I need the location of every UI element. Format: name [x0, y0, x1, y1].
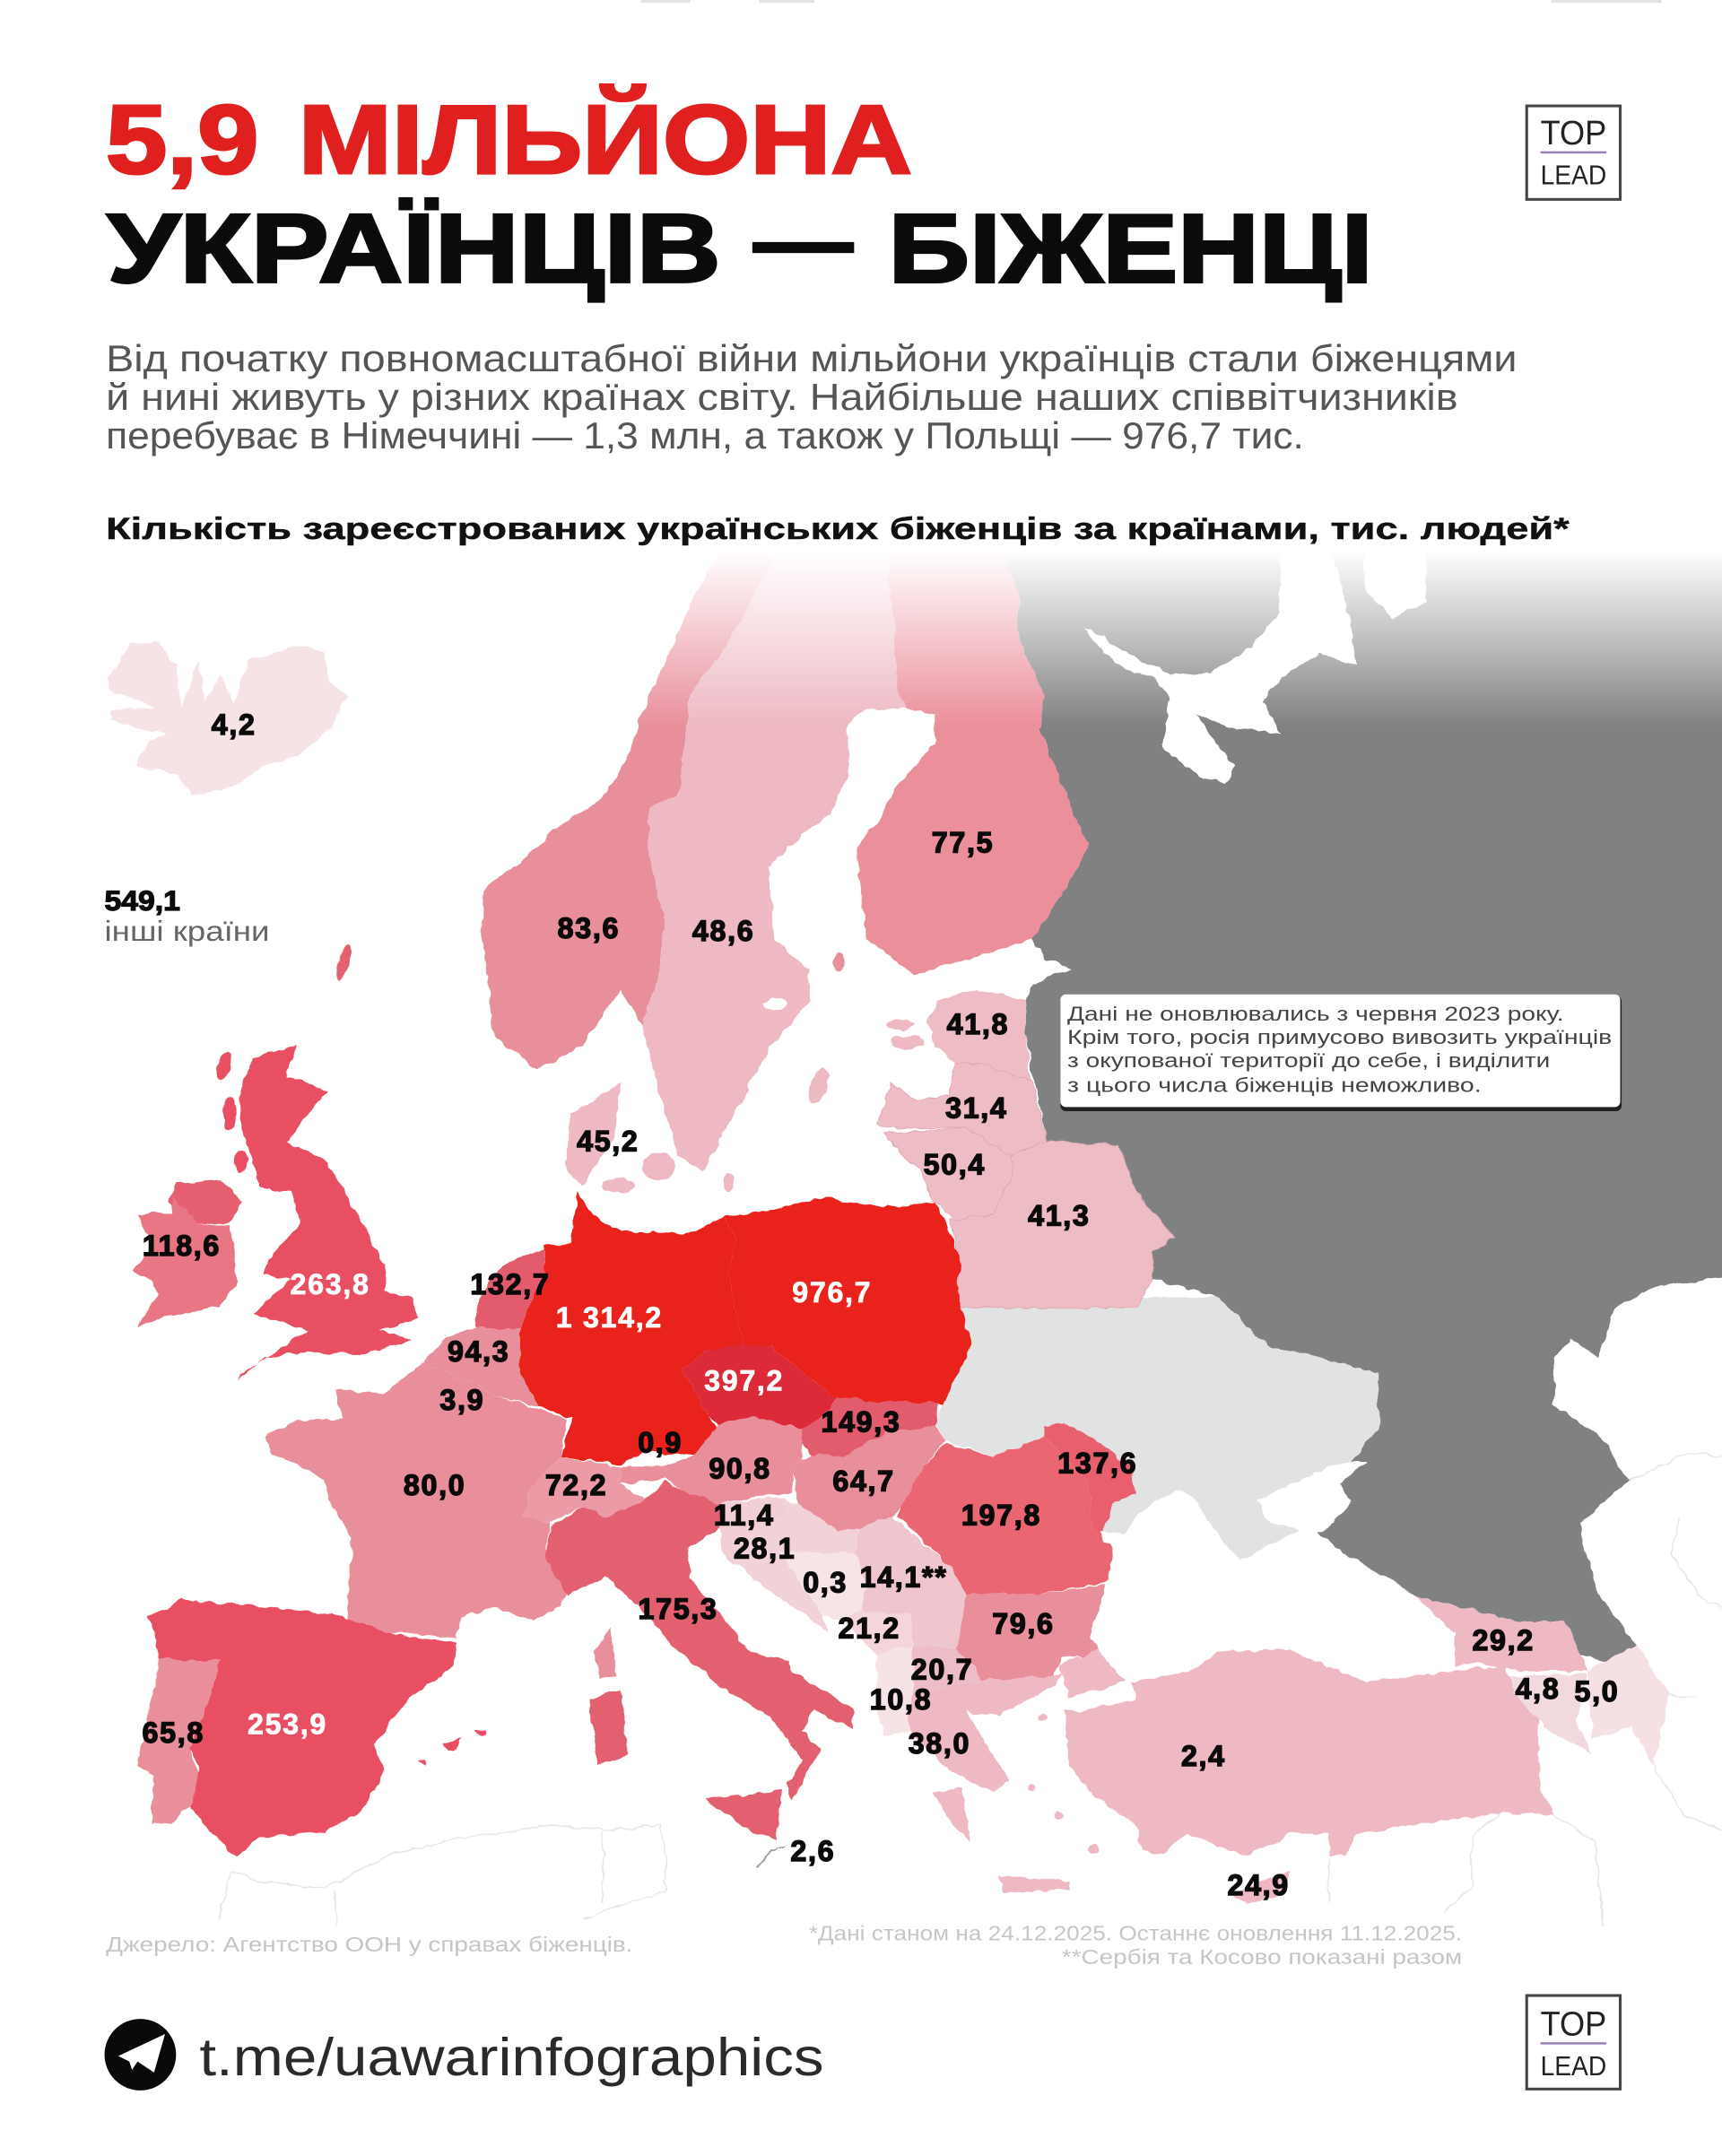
region: finland	[856, 536, 1090, 975]
region: hungary	[792, 1426, 945, 1531]
title: БІЖЕНЦІ	[889, 194, 1372, 303]
data labels: 29,2	[1472, 1624, 1535, 1656]
callout: russia data note	[1060, 995, 1622, 1111]
data labels: 31,4	[945, 1092, 1008, 1125]
chart heading: Кількість зареєстрованих українських біженців за країнами, тис. людей*	[106, 512, 1570, 546]
data labels: 10,8	[870, 1683, 932, 1716]
data labels: 4,2	[212, 709, 257, 741]
data labels: 2,4	[1181, 1740, 1226, 1772]
region: turkey	[1059, 1649, 1554, 1856]
data labels: 118,6	[143, 1230, 221, 1262]
region: lithuania	[883, 1127, 1015, 1220]
region: austria	[622, 1416, 802, 1503]
data labels: 197,8	[961, 1500, 1041, 1532]
region: azerbaijan	[1587, 1645, 1670, 1766]
data labels: 80,0	[404, 1469, 465, 1501]
region: moldova	[1044, 1423, 1136, 1534]
callout: russia data note: Дані не оновлювались з червня 2023 року.	[1067, 1003, 1564, 1025]
logo: top lead (footer): LEAD	[1541, 2051, 1606, 2082]
intro text: й нині живуть у різних країнах світу. Найбільше наших співвітчизників	[106, 377, 1458, 418]
title: 5,9	[106, 85, 258, 195]
region: georgia	[1417, 1596, 1587, 1671]
data labels: 0,9	[638, 1426, 683, 1458]
logo: top lead (header)	[1526, 106, 1621, 199]
region: estonia	[927, 990, 1031, 1082]
data labels: 14,1**	[860, 1561, 947, 1594]
data labels: 976,7	[792, 1276, 872, 1308]
data labels: 38,0	[909, 1727, 970, 1760]
data labels: 79,6	[992, 1608, 1055, 1640]
region: france	[264, 1363, 616, 1678]
icon: telegram	[105, 2019, 176, 2091]
region: romania	[897, 1437, 1113, 1594]
logo: top lead (header): TOP	[1541, 114, 1606, 152]
data labels: 4,8	[1516, 1673, 1560, 1705]
data labels: 64,7	[832, 1465, 895, 1497]
footnotes: **Сербія та Косово показані разом	[1062, 1945, 1462, 1969]
data labels: 253,9	[248, 1708, 327, 1741]
top edge remnants	[641, 0, 1662, 3]
logo: top lead (header): LEAD	[1541, 160, 1606, 190]
region: germany and poland	[520, 1193, 971, 1465]
region: latvia	[877, 1063, 1048, 1155]
data labels: 65,8	[143, 1717, 204, 1749]
region: albania	[876, 1647, 915, 1737]
data labels: 137,6	[1057, 1447, 1137, 1479]
data labels: 83,6	[558, 912, 620, 944]
region: portugal	[137, 1658, 220, 1823]
data labels: 41,8	[947, 1008, 1009, 1040]
data labels: 50,4	[924, 1149, 986, 1181]
data labels: 21,2	[838, 1612, 900, 1644]
region: montenegro	[843, 1609, 912, 1656]
region: russia	[998, 536, 1722, 1665]
intro text	[106, 338, 1518, 456]
data labels: 28,1	[734, 1532, 796, 1564]
region: czechia	[683, 1343, 836, 1429]
region: belgium and luxembourg	[423, 1327, 539, 1407]
other countries figure	[105, 885, 270, 947]
data labels: 77,5	[932, 827, 994, 859]
intro text: перебуває в Німеччині — 1,3 млн, а також у Польщі — 976,7 тис.	[106, 415, 1304, 456]
source note: Джерело: Агентство ООН у справах біженців.	[106, 1933, 632, 1956]
data labels: 0,3	[803, 1567, 848, 1599]
data labels: 3,9	[439, 1384, 484, 1416]
telegram link: t.me/uawarinfographics	[199, 2027, 824, 2087]
data labels: 45,2	[577, 1126, 639, 1158]
other countries figure: 549,1	[105, 885, 180, 917]
data labels: 263,8	[291, 1268, 370, 1300]
data labels: 20,7	[911, 1653, 973, 1685]
faint neighbouring outlines	[220, 1454, 1722, 1926]
data labels: 48,6	[692, 915, 754, 947]
data labels: 94,3	[448, 1335, 509, 1368]
region: united kingdom	[168, 943, 418, 1382]
data labels: 149,3	[822, 1405, 900, 1438]
region: north macedonia	[912, 1645, 980, 1691]
data labels: 11,4	[714, 1500, 774, 1532]
callout: russia data note: Крім того, росія примусово вивозить українців	[1067, 1026, 1612, 1048]
region: slovakia	[802, 1397, 938, 1455]
region: slovenia	[721, 1498, 792, 1564]
region: italy	[544, 1482, 853, 1840]
region: malta	[758, 1847, 787, 1867]
data labels: 1 314,2	[556, 1301, 663, 1334]
title: МІЛЬЙОНА	[299, 83, 912, 195]
callout: russia data note: з цього числа біженців неможливо.	[1067, 1074, 1482, 1097]
region: serbia	[856, 1516, 966, 1650]
top fade overlay	[413, 550, 1722, 726]
title	[106, 83, 1372, 303]
region: sweden	[642, 536, 907, 1172]
region: ireland	[134, 1196, 237, 1327]
data labels: 24,9	[1227, 1869, 1290, 1901]
region: greece	[909, 1671, 1099, 1892]
footnotes: *Дані станом на 24.12.2025. Останнє оновлення 11.12.2025.	[809, 1922, 1462, 1945]
footnotes	[809, 1922, 1462, 1969]
region: switzerland	[523, 1456, 644, 1523]
logo: top lead (footer): TOP	[1541, 2005, 1606, 2044]
region: bosnia	[780, 1552, 866, 1620]
other countries figure: інші країни	[105, 916, 270, 947]
region: belarus	[949, 1142, 1175, 1308]
region: denmark	[565, 1082, 735, 1194]
region: cyprus	[1230, 1871, 1290, 1903]
data labels	[143, 709, 1619, 1901]
data labels: 397,2	[704, 1364, 784, 1396]
data labels: 5,0	[1575, 1675, 1619, 1708]
logo: top lead (footer)	[1526, 1995, 1621, 2089]
data labels: 175,3	[639, 1593, 718, 1625]
region: iceland	[108, 642, 348, 795]
data labels: 72,2	[545, 1469, 607, 1501]
callout: russia data note: з окупованої території до себе, і виділити	[1067, 1049, 1550, 1072]
title: УКРАЇНЦІВ	[108, 194, 721, 303]
intro text: Від початку повномасштабної війни мільйони українців стали біженцями	[106, 338, 1518, 379]
region: bulgaria	[957, 1585, 1106, 1681]
map of Europe	[108, 536, 1722, 1926]
data labels: 2,6	[790, 1835, 835, 1867]
data labels: 41,3	[1028, 1199, 1091, 1231]
data labels: 132,7	[470, 1268, 550, 1300]
region: norway	[483, 536, 784, 1070]
region: spain	[149, 1599, 485, 1856]
region: ukraine	[935, 1297, 1378, 1560]
region: armenia	[1510, 1674, 1593, 1755]
data labels: 90,8	[709, 1452, 771, 1484]
region: croatia	[733, 1498, 858, 1632]
region: netherlands	[474, 1248, 544, 1330]
region: baltic islands	[763, 953, 925, 1106]
